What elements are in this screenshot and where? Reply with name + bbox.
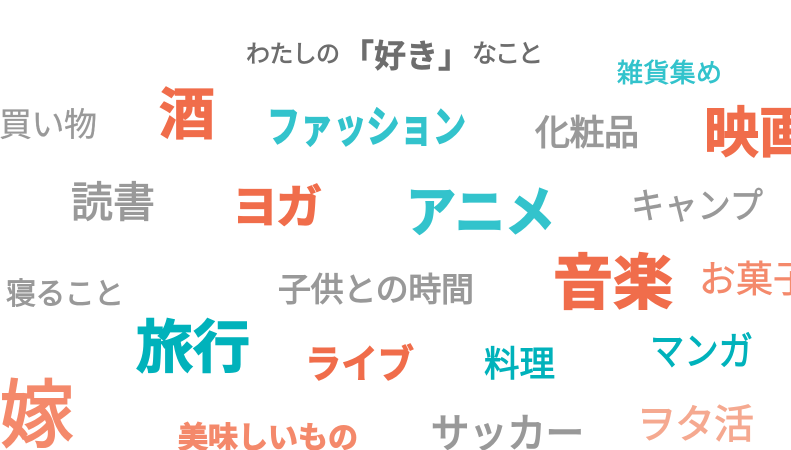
word: 読書: 読書 xyxy=(71,179,155,226)
title: わたしの xyxy=(246,41,340,68)
word: ヲタ活: ヲタ活 xyxy=(636,403,754,447)
word: ライブ: ライブ xyxy=(305,343,414,387)
word: 雑貨集め: 雑貨集め xyxy=(617,58,722,88)
word: アニメ: アニメ xyxy=(406,183,555,243)
word: ファッション: ファッション xyxy=(267,104,466,152)
word: 旅行: 旅行 xyxy=(136,316,250,380)
title xyxy=(246,38,543,74)
word: マンガ: マンガ xyxy=(650,331,753,374)
word: キャンプ: キャンプ xyxy=(631,185,763,226)
title: 「好き」 xyxy=(342,38,470,74)
word: 寝ること: 寝ること xyxy=(6,278,124,311)
title: なこと xyxy=(472,40,543,68)
word: 化粧品: 化粧品 xyxy=(535,114,639,153)
word: 買い物: 買い物 xyxy=(0,106,97,143)
word: ヨガ: ヨガ xyxy=(232,181,322,233)
word: 子供との時間: 子供との時間 xyxy=(278,271,474,308)
word: 料理: 料理 xyxy=(484,344,555,384)
word: 酒: 酒 xyxy=(159,83,215,146)
word: 音楽: 音楽 xyxy=(553,250,673,317)
